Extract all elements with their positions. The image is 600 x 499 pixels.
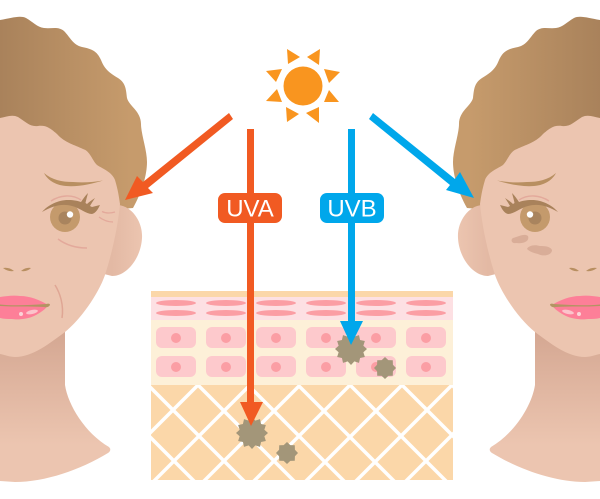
right eyelid crease [519,196,549,201]
label: UVB: UVB [327,196,377,222]
right ear [458,205,496,276]
left eyelid crease [51,196,81,201]
left smile wrinkle [55,285,63,318]
melanin cluster: epidermis large [335,333,367,365]
right eye [500,193,558,232]
left ear [104,205,142,276]
left face: aged by UVA [0,17,147,482]
dermis with collagen lattice [151,385,453,480]
right hair [453,17,600,210]
left eyebrow [44,173,103,186]
arrow: UVB into epidermis [340,129,363,345]
left face shape [0,116,120,357]
right lips [550,296,600,319]
pink epidermis layer with flat cells [151,297,453,320]
melanin cluster: epidermis small [374,357,396,379]
arrow: UVA to left face [125,113,233,200]
right nostrils [569,268,597,271]
melanin cluster: dermis large [236,417,268,449]
right neck [490,322,600,482]
icon: sun [266,49,340,123]
left eye [42,193,100,232]
left nostrils [3,268,31,271]
right eyelashes [500,193,558,214]
left lips [0,296,50,319]
label: UVA [218,193,282,223]
right eyebrow [497,173,556,186]
left neck [0,322,110,482]
cream layer with rounded cells [151,320,453,385]
arrow: UVA into dermis [240,129,263,426]
stratum corneum band [151,291,453,297]
right age spots [512,235,552,255]
right face shape [480,116,600,357]
left hair [0,17,147,210]
melanin cluster: dermis small [276,442,298,464]
right face: spotted by UVB [453,17,600,482]
arrow: UVB to right face [369,113,474,198]
left under-eye wrinkle [58,239,87,248]
skin cross-section diagram [151,291,453,480]
label: UVA: UVA [226,196,274,222]
label: UVB [320,193,384,223]
left eyelashes [42,193,100,214]
left crow's feet wrinkles [99,212,115,222]
